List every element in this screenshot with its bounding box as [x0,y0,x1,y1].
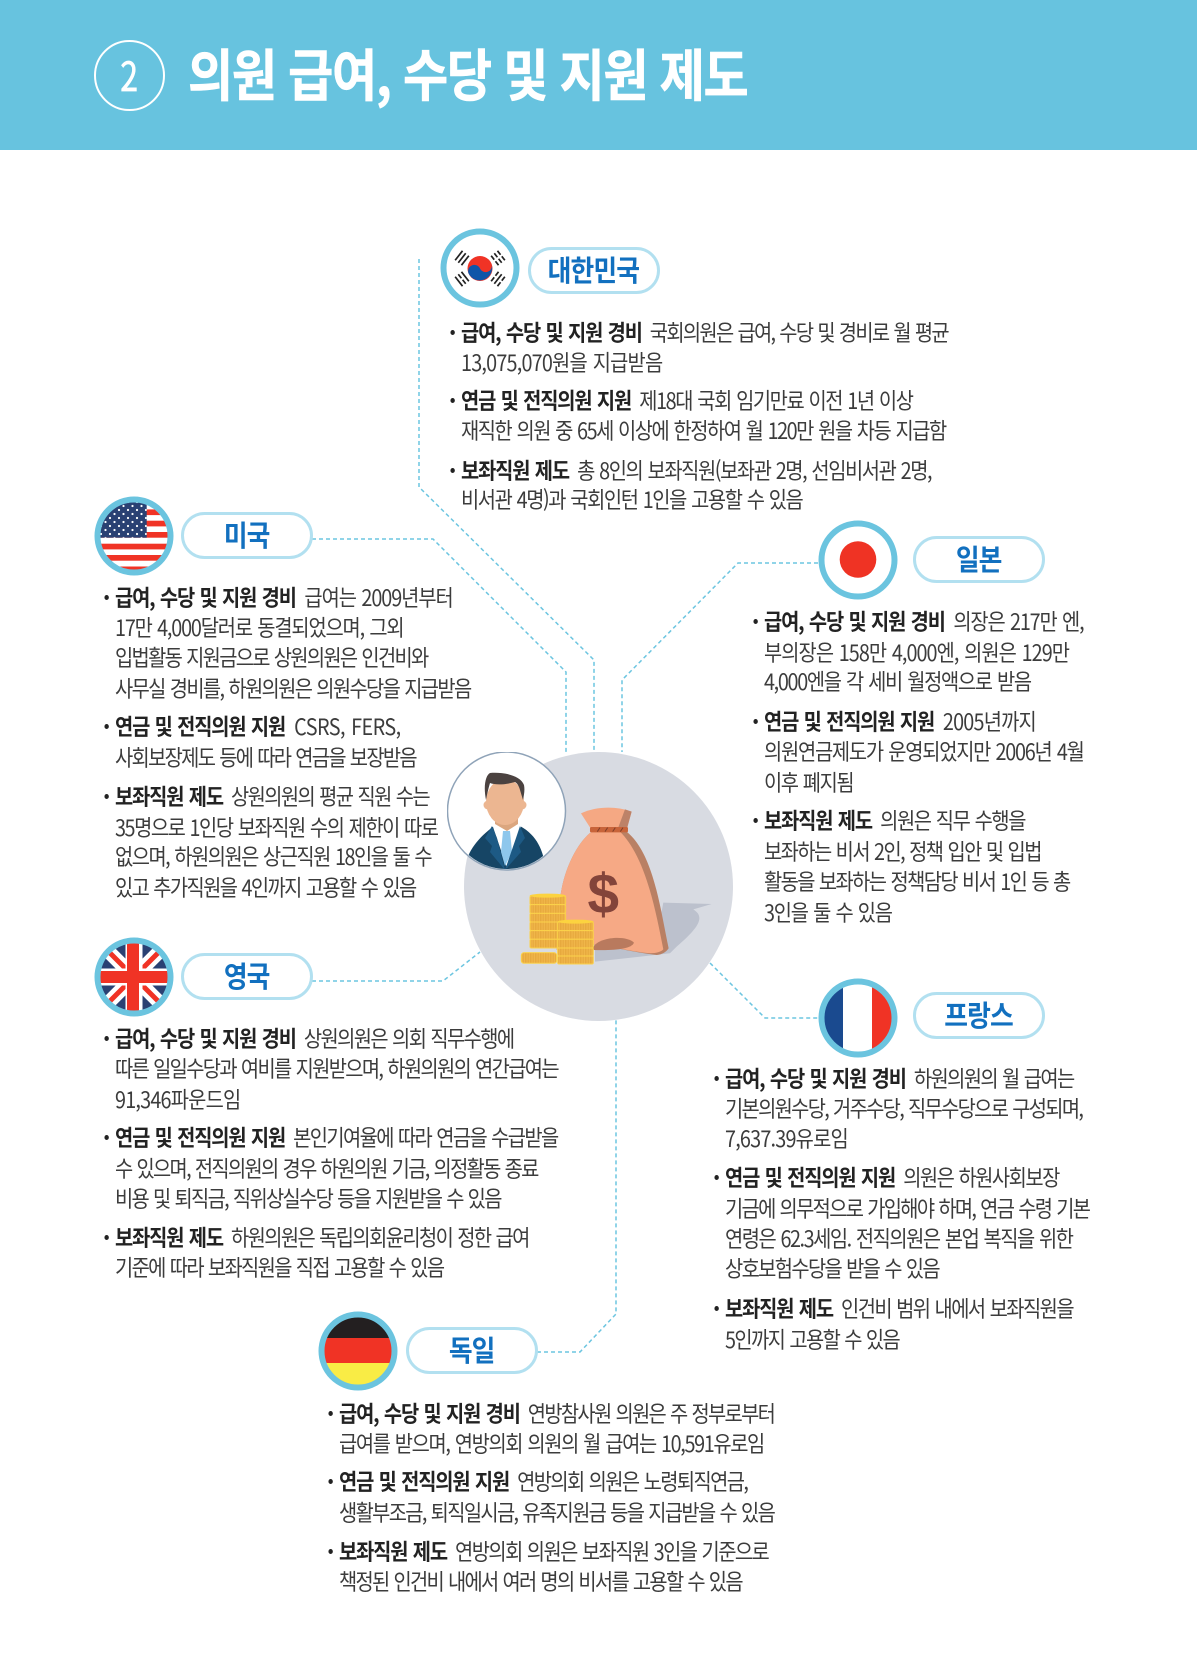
text: 프랑스 details: 급여, 수당 및 지원 경비 하원의원의 월 급여는 [725,1062,1074,1094]
icon: money bag [521,808,712,964]
icon: person in suit [448,752,566,872]
text: 일본 details: 보좌직원 제도 의원은 직무 수행을 [764,804,1025,836]
text: 독일 details: 급여를 받으며, 연방의회 의원의 월 급여는 10,591유로임 [339,1426,764,1458]
text: 미국 details: 사회보장제도 등에 따라 연금을 보장받음 [115,741,416,773]
text: 대한민국 details: 급여, 수당 및 지원 경비 국회의원은 급여, 수당 및 경비로 월 평균 [461,316,948,348]
icon: Japanese flag [818,520,898,600]
country label: 미국 [181,512,312,559]
text: 프랑스 details [714,1062,1090,1354]
text: 독일 details: 생활부조금, 퇴직일시금, 유족지원금 등을 지급받을 수 있음 [339,1496,774,1528]
text: 영국 details: 기준에 따라 보좌직원을 직접 고용할 수 있음 [115,1250,443,1282]
text: 영국 details: 보좌직원 제도 하원의원은 독립의회윤리청이 정한 급여 [115,1221,529,1253]
country label: 독일 [406,1327,538,1374]
central illustration: money bag and person [447,752,733,1021]
country label: 대한민국 [528,247,660,294]
text: 대한민국 details: 보좌직원 제도 총 8인의 보좌직원(보좌관 2명, 선임비서관 2명, [461,454,931,486]
text: 영국 details: 급여, 수당 및 지원 경비 상원의원은 의회 직무수행에 [115,1022,514,1054]
text: 미국 details: 17만 4,000달러로 동결되었으며, 그외 [115,611,403,643]
text: 미국 details [104,580,472,903]
coins [521,896,593,964]
icon: French flag [818,978,898,1058]
text: 대한민국 details: 비서관 4명)과 국회인턴 1인을 고용할 수 있음 [461,482,802,514]
text: 대한민국 details [450,316,949,514]
country label: 영국: 영국 [224,954,270,996]
text: 일본 details: 4,000엔을 각 세비 월정액으로 받음 [764,665,1030,697]
text: 프랑스 details: 기금에 의무적으로 가입해야 하며, 연금 수령 기본 [725,1192,1089,1224]
text: 미국 details: 있고 추가직원을 4인까지 고용할 수 있음 [115,871,416,903]
text: 영국 details: 수 있으며, 전직의원의 경우 하원의원 기금, 의정활동 종료 [115,1152,538,1184]
text: 미국 details: 급여, 수당 및 지원 경비 급여는 2009년부터 [115,580,453,612]
header band [0,0,1197,150]
text: 대한민국 details: 연금 및 전직의원 지원 제18대 국회 임기만료 이전 1년 이상 [461,384,913,416]
text: 프랑스 details: 상호보험수당을 받을 수 있음 [725,1252,939,1284]
text: 프랑스 details: 기본의원수당, 거주수당, 직무수당으로 구성되며, [725,1092,1082,1124]
text: 영국 details: 비용 및 퇴직금, 직위상실수당 등을 지원받을 수 있음 [115,1182,501,1214]
panel: 독일 [318,1312,775,1597]
icon: US flag [94,496,174,576]
panel: 일본 [753,520,1084,928]
icon: Korean flag [440,228,520,308]
text: 영국 details: 연금 및 전직의원 지원 본인기여율에 따라 연금을 수급받을 [115,1120,558,1152]
text: 미국 details: 보좌직원 제도 상원의원의 평균 직원 수는 [115,780,429,812]
country label: 독일: 독일 [449,1328,495,1370]
country label: 일본 [913,536,1044,583]
text: 영국 details: 따른 일일수당과 여비를 지원받으며, 하원의원의 연간급여는 [115,1052,558,1084]
dollar sign: $ [588,863,619,926]
country label: 대한민국: 대한민국 [548,248,639,290]
text: 프랑스 details: 7,637.39유로임 [725,1122,848,1154]
text: 독일 details [328,1396,775,1597]
text: 일본 details: 부의장은 158만 4,000엔, 의원은 129만 [764,636,1069,668]
text: 일본 details: 연금 및 전직의원 지원 2005년까지 [764,704,1035,736]
text: 프랑스 details: 5인까지 고용할 수 있음 [725,1322,899,1354]
text: 미국 details: 35명으로 1인당 보좌직원 수의 제한이 따로 [115,810,438,842]
panel: 대한민국 [440,228,949,514]
text: 영국 details [104,1022,559,1282]
text: 독일 details: 연금 및 전직의원 지원 연방의회 의원은 노령퇴직연금, [339,1464,747,1496]
text: 대한민국 details: 재직한 의원 중 65세 이상에 한정하여 월 120만 원을 차등 지급함 [461,414,946,446]
section number badge: 2 [121,45,138,103]
text: 독일 details: 급여, 수당 및 지원 경비 연방참사원 의원은 주 정부로부터 [339,1396,774,1428]
text: 프랑스 details: 보좌직원 제도 인건비 범위 내에서 보좌직원을 [725,1292,1073,1324]
text: 일본 details [753,604,1084,928]
text: 일본 details: 활동을 보좌하는 정책담당 비서 1인 등 총 [764,864,1069,896]
panel: 영국 [94,938,559,1282]
text: 독일 details: 보좌직원 제도 연방의회 의원은 보좌직원 3인을 기준으로 [339,1534,768,1566]
country label: 미국: 미국 [224,513,270,555]
icon: UK flag [94,938,174,1016]
text: 미국 details: 입법활동 지원금으로 상원의원은 인건비와 [115,641,428,673]
text: 일본 details: 이후 폐지됨 [764,766,853,798]
background disc [464,752,733,1021]
text: 미국 details: 사무실 경비를, 하원의원은 의원수당을 지급받음 [115,672,471,704]
text: 일본 details: 보좌하는 비서 2인, 정책 입안 및 입법 [764,834,1040,866]
text: 일본 details: 의원연금제도가 운영되었지만 2006년 4월 [764,734,1083,766]
text: 미국 details: 연금 및 전직의원 지원 CSRS, FERS, [115,710,401,742]
country label: 영국 [181,953,312,1000]
panel: 미국 [94,496,472,903]
text: 일본 details: 급여, 수당 및 지원 경비 의장은 217만 엔, [764,604,1083,636]
section number badge [94,40,165,111]
text: 미국 details: 없으며, 하원의원은 상근직원 18인을 둘 수 [115,840,431,872]
text: 독일 details: 책정된 인건비 내에서 여러 명의 비서를 고용할 수 있음 [339,1565,742,1597]
title: 의원 급여, 수당 및 지원 제도 [188,32,747,113]
country label: 일본: 일본 [956,537,1002,579]
text: 영국 details: 91,346파운드임 [115,1082,240,1114]
text: 프랑스 details: 연령은 62.3세임. 전직의원은 본업 복직을 위한 [725,1222,1072,1254]
text: 일본 details: 3인을 둘 수 있음 [764,896,891,928]
country label: 프랑스 [913,992,1044,1039]
text: 대한민국 details: 13,075,070원을 지급받음 [461,346,662,378]
country label: 프랑스: 프랑스 [944,993,1013,1035]
panel: 프랑스 [714,978,1090,1354]
text: 프랑스 details: 연금 및 전직의원 지원 의원은 하원사회보장 [725,1160,1059,1192]
icon: German flag [318,1312,398,1390]
